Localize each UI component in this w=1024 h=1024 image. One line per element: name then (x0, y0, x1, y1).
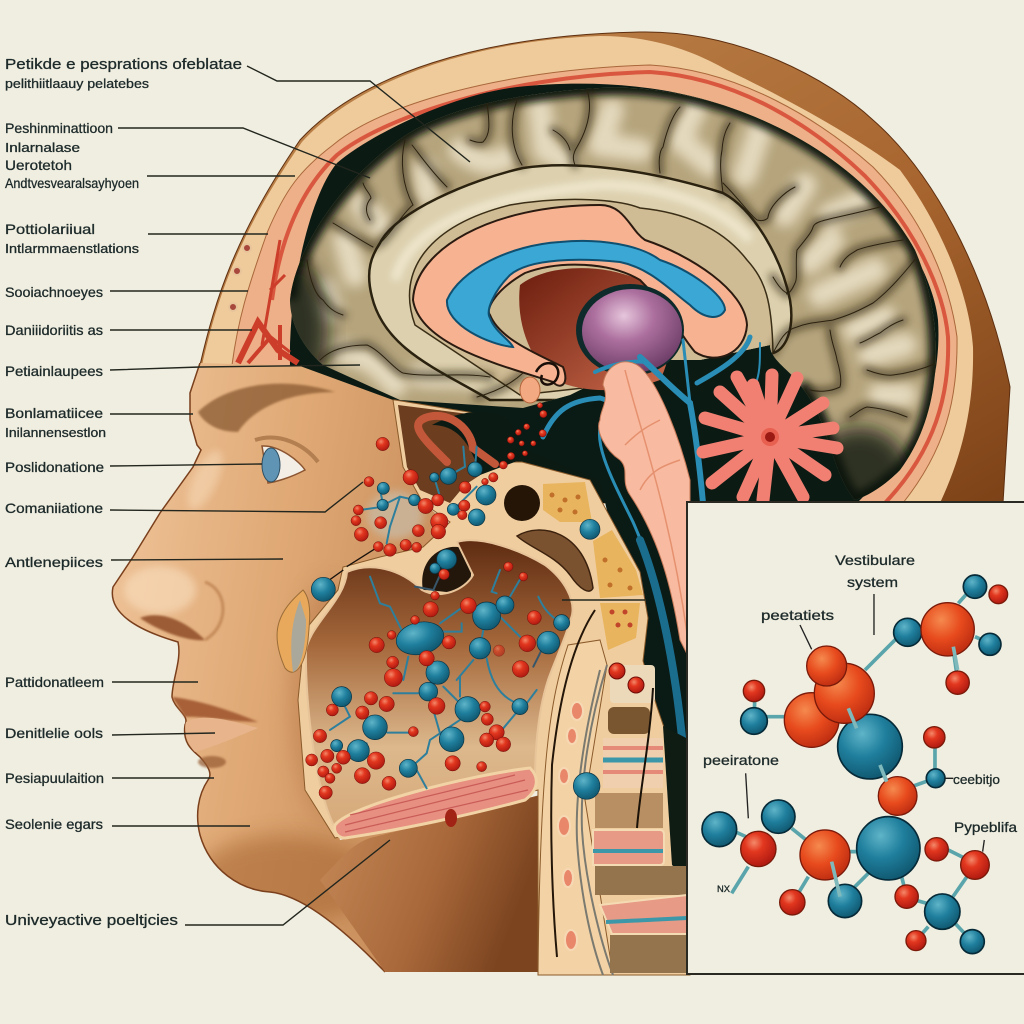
label 2: pelithiitlaauy pelatebes (5, 76, 150, 91)
cingulate cream band (369, 165, 791, 400)
blue atoms (311, 462, 600, 799)
left labels (5, 56, 242, 929)
gyri highlights (325, 108, 905, 395)
pineal curl (536, 363, 558, 385)
label 5: Uerotetoh (5, 157, 72, 173)
label 12: Bonlamatiicee (5, 405, 103, 421)
ear-like oval tissue (277, 590, 310, 672)
molecules in sinus and mouth (306, 403, 600, 799)
spine red atoms (609, 663, 644, 693)
label 13: Inilannensestlon (5, 425, 106, 440)
porous bone (543, 482, 643, 650)
spine base (538, 640, 613, 975)
inset molecule (702, 575, 1008, 954)
spine ovals (558, 702, 583, 950)
coral pink gland (703, 375, 837, 500)
brain left shadow (290, 258, 344, 371)
dark cranial cavity (290, 84, 938, 503)
oral cavity (306, 540, 573, 836)
label 3: Peshinminattioon (5, 120, 113, 136)
vertebra brown one (595, 793, 663, 828)
skull outer brown rim (200, 32, 1010, 503)
label 11: Petiainlaupees (5, 363, 103, 379)
inset label: system: system (847, 574, 898, 590)
membrane vessels (238, 240, 298, 363)
lip (185, 718, 258, 752)
striped disc two (593, 830, 664, 865)
inset blue atoms (702, 575, 1001, 954)
inset top bonds (832, 647, 958, 897)
bone around mouth and sinus (298, 400, 690, 975)
brain (290, 88, 936, 500)
skull dots (229, 244, 251, 311)
label 20: Seolenie egars (5, 816, 103, 832)
vertebra brown two (595, 866, 687, 895)
label 8: Intlarmmaenstlations (5, 241, 140, 256)
molecule inset panel (687, 502, 1024, 974)
muscle band tongue (335, 768, 536, 838)
label 10: Daniiidoriitis as (5, 322, 103, 338)
small peach knob (520, 377, 540, 403)
chin crease (198, 756, 226, 768)
label 7: Pottiolariiual (5, 221, 95, 237)
inset label: Pypeblifa: Pypeblifa (954, 819, 1017, 835)
thalamus dark outline (576, 284, 684, 376)
spine column (538, 610, 690, 975)
neck lower area (320, 795, 540, 972)
striped disc three (600, 895, 687, 934)
nose wing (205, 582, 223, 640)
corpus callosum arch (413, 205, 747, 386)
cingulate highlight (395, 185, 750, 280)
bone hole (504, 485, 540, 521)
inset label: Vestibulare: Vestibulare (835, 552, 915, 568)
inset red atoms (741, 585, 1008, 951)
vertebra hole (608, 707, 650, 734)
eye (255, 438, 318, 483)
inset bonds (732, 588, 990, 942)
leader lines (110, 66, 645, 925)
brain central red cavity (519, 268, 669, 390)
label 16: Antlenepiices (5, 554, 103, 570)
face outline (112, 363, 385, 972)
label 14: Poslidonatione (5, 459, 104, 475)
brainstem (599, 362, 690, 660)
label 15: Comaniiatione (5, 500, 103, 516)
small arch cavity (422, 547, 471, 592)
skull red membrane line (272, 72, 948, 503)
skull pink striped membrane (232, 65, 957, 503)
thalamus purple sphere (582, 289, 682, 373)
upper cavity dark part (432, 412, 520, 475)
label 18: Denitlelie ools (5, 725, 103, 741)
vertebra top block (610, 665, 655, 703)
brainstem creases (625, 370, 688, 640)
skull tan bone band (202, 36, 973, 503)
blue vessels (543, 337, 760, 790)
inset label: NX: NX (717, 884, 730, 894)
molecule bonds (330, 447, 562, 788)
label 17: Pattidonatleem (5, 674, 104, 690)
nostril (140, 615, 205, 640)
spine black edge (551, 610, 595, 957)
skin fill (112, 363, 540, 972)
inset pointer lines (746, 594, 984, 852)
dark band by vertebrae (663, 726, 690, 880)
vertebra brown three (610, 935, 687, 973)
label 9: Sooiachnoeyes (5, 284, 103, 300)
upper brown cavity (398, 405, 520, 503)
red hook (418, 416, 495, 464)
label 21: Univeyactive poeltjcies (5, 912, 178, 929)
face and neck skin (112, 363, 540, 972)
face shading (124, 446, 423, 925)
inset box (687, 502, 1024, 974)
inner tan band (409, 199, 773, 395)
eyebrow (198, 384, 335, 432)
inset label: peetatiets: peetatiets (761, 607, 834, 623)
red atoms (306, 403, 547, 799)
black connector (320, 547, 378, 587)
mouth (172, 697, 258, 722)
spine tendon lines (577, 665, 613, 975)
inset label: peeiratone: peeiratone (703, 752, 779, 768)
brain folds (307, 90, 937, 417)
inset label: ceebitjo: ceebitjo (953, 772, 1000, 787)
brain edge vignette (290, 88, 936, 500)
striped disc one (603, 738, 663, 788)
brain base (285, 80, 955, 510)
ventricle blue (447, 241, 725, 347)
brain bottom right shadow (826, 414, 912, 500)
crescent sinus (517, 530, 593, 591)
soft fold shadow (307, 90, 937, 417)
label 19: Pesiapuulaition (5, 770, 104, 786)
label 6: Andtvesvearalsayhyoen (5, 175, 139, 191)
label 4: Inlarnalase (5, 140, 80, 155)
dark region behind brainstem (395, 395, 700, 880)
spine vertical dark line (637, 688, 653, 828)
label 1: Petikde e pesprations ofeblatae (5, 56, 242, 73)
